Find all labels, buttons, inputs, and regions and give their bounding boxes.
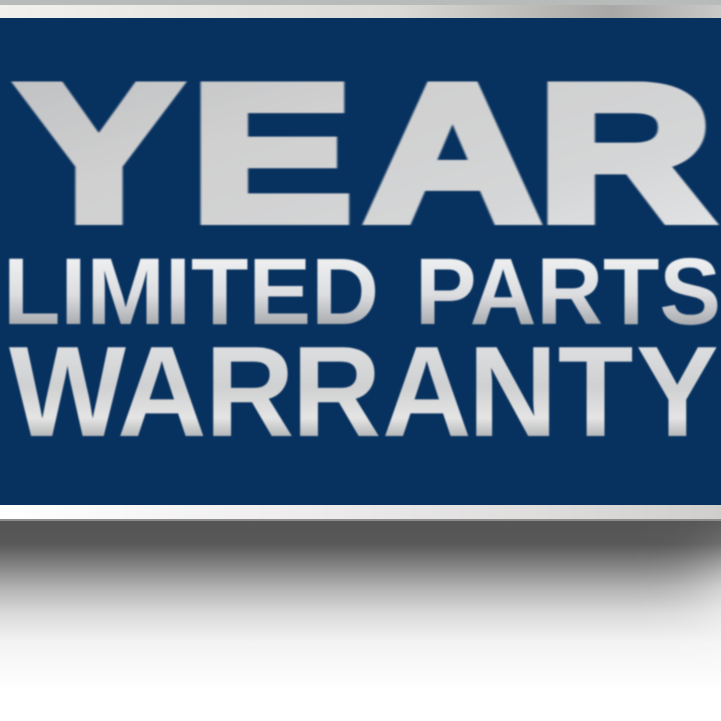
- text: WARRANTY: WARRANTY: [9, 320, 719, 464]
- text: LIMITED PARTS: PARTS: [415, 239, 721, 345]
- text: LIMITED PARTS: LIMITED: [3, 239, 379, 345]
- text: LIMITED PARTS: [3, 239, 721, 345]
- drop shadow below badge: [0, 520, 721, 695]
- badge panel: [0, 0, 721, 521]
- heading: YEAR: YEAR: [18, 44, 713, 262]
- bottom silver border: [0, 505, 721, 521]
- top silver border: [0, 0, 721, 18]
- navy panel: [0, 18, 721, 505]
